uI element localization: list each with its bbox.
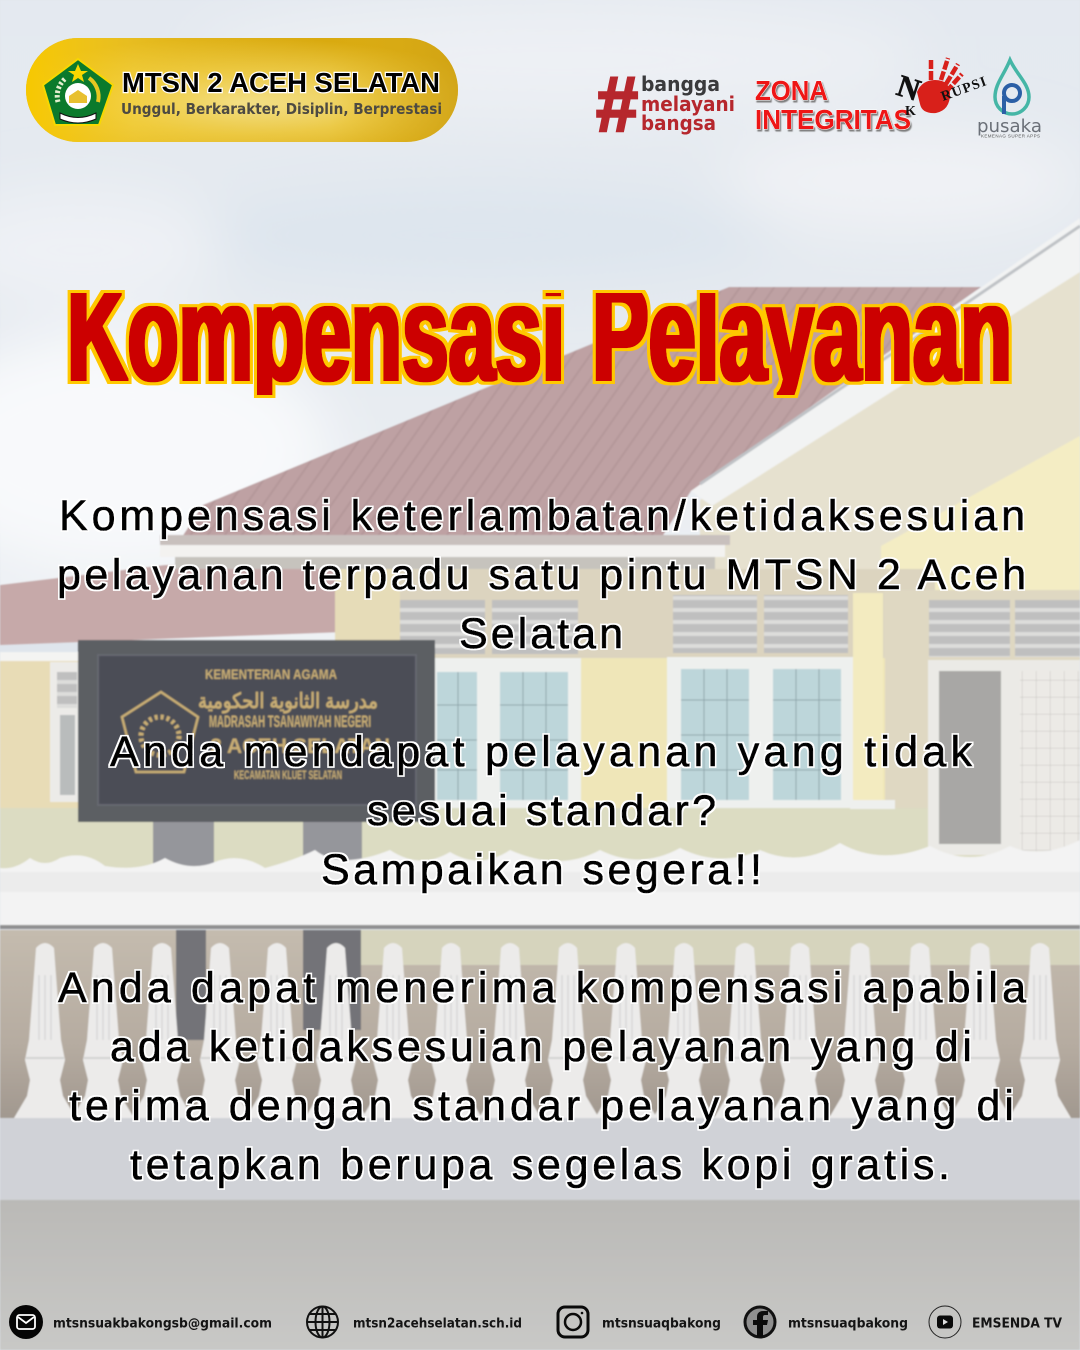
text block: question: Anda mendapat pelayanan yang tidak [110, 728, 972, 776]
school sign board: مدرسة الثانوية الحكومية [198, 690, 378, 714]
icon: instagram [558, 1307, 588, 1337]
text block: intro: pelayanan terpadu satu pintu MTSN 2 Aceh [57, 551, 1026, 599]
school name: MTSN 2 ACEH SELATAN [122, 67, 440, 98]
upper wall yellow part [335, 569, 400, 659]
lower green wall [0, 808, 1080, 878]
word: rupsi: RUPSI [939, 75, 989, 105]
window sill strip [0, 652, 78, 661]
title [68, 290, 1012, 398]
left small window [50, 662, 78, 802]
fence base [0, 1118, 1080, 1202]
text block: compensation: ada ketidaksesuian pelayanan yang di [110, 1023, 972, 1071]
upper wall [335, 569, 935, 661]
text block: question [110, 728, 972, 894]
youtube channel: EMSENDA TV [972, 1316, 1062, 1332]
instagram handle: mtsnsuaqbakong [602, 1316, 721, 1332]
footer contact bar [9, 1305, 1062, 1339]
bright wall strip [881, 436, 1080, 600]
icon: red hand [917, 58, 962, 113]
school sign board: MADRASAH TSANAWIYAH NEGERI [209, 712, 371, 731]
main red roof [180, 287, 981, 540]
text block: compensation: Anda dapat menerima kompensasi apabila [58, 964, 1026, 1012]
letter N: N [893, 68, 925, 108]
sky [0, 0, 1080, 640]
yellow wall [435, 658, 885, 810]
facebook handle: mtsnsuaqbakong [788, 1316, 908, 1332]
louvers [400, 595, 1080, 657]
text block: intro: Kompensasi keterlambatan/ketidaksesuian [59, 492, 1025, 540]
logo: bangga melayani bangsa [595, 60, 735, 148]
school sign board [78, 640, 435, 822]
icon: youtube [929, 1306, 961, 1338]
yard behind fence [0, 930, 1080, 1125]
word: melayani: melayani [641, 92, 735, 116]
word: bangsa: bangsa [641, 111, 716, 135]
wall tan right [884, 590, 1080, 820]
text block: compensation: terima dengan standar pelayanan yang di [69, 1082, 1014, 1130]
fence top rail [0, 840, 1080, 925]
icon: globe [307, 1306, 338, 1338]
door and grille [928, 660, 1080, 855]
word: zona: ZONA [755, 75, 828, 106]
eave [160, 535, 730, 569]
wall [0, 655, 80, 830]
school sign board: 2 ACEH SELATAN [210, 735, 390, 758]
school sign board: KEMENTERIAN AGAMA [205, 666, 337, 682]
text block: intro [57, 492, 1026, 658]
gold pill [26, 38, 458, 142]
email address: mtsnsuakbakongsb@gmail.com [53, 1316, 272, 1332]
far wall behind fence right [360, 930, 1080, 965]
logo: no korupsi hand [893, 58, 989, 119]
ground [0, 1200, 1080, 1350]
text block: compensation [58, 964, 1026, 1189]
fence balusters [14, 943, 1071, 1118]
white gable fascia [691, 218, 1080, 506]
small caption: KEMENAG SUPER APPS [981, 134, 1040, 138]
clouds [0, 5, 1080, 570]
lower left roof [0, 565, 345, 645]
tagline: Unggul, Berkarakter, Disiplin, Berprestasi [121, 100, 442, 118]
text block: intro: Selatan [459, 610, 623, 658]
gable soffit and wall [700, 265, 1080, 600]
icon: facebook [745, 1307, 775, 1337]
header banner [26, 38, 458, 142]
sign posts [153, 815, 362, 905]
pillar [853, 593, 883, 804]
icon: email [9, 1305, 43, 1339]
fascia shadow line [700, 226, 1080, 484]
website: mtsn2acehselatan.sch.id [353, 1316, 522, 1332]
word: integritas: INTEGRITAS [755, 104, 911, 135]
posts behind fence [176, 930, 361, 1040]
text block: question: sesuai standar? [367, 787, 716, 835]
title: Kompensasi [67, 257, 565, 409]
windows [433, 657, 895, 809]
icon: ministry logo [43, 59, 113, 125]
school sign board: KECAMATAN KLUET SELATAN [234, 768, 342, 782]
body text wrapper [57, 492, 1026, 1189]
text block: question: Sampaikan segera!! [321, 846, 762, 894]
icon: hash: # [595, 60, 638, 148]
word: bangga: bangga [641, 72, 720, 96]
fence shadow [0, 925, 1080, 929]
word: pusaka: pusaka [977, 116, 1042, 137]
logo: zona integritas [755, 75, 911, 135]
pill sheen [26, 38, 458, 142]
letter K: K [905, 104, 916, 119]
icon: pusaka drop [995, 60, 1029, 114]
logo: pusaka [977, 60, 1042, 138]
text block: compensation: tetapkan berupa segelas kopi gratis. [130, 1141, 950, 1189]
fence ornament texture [0, 872, 1080, 892]
